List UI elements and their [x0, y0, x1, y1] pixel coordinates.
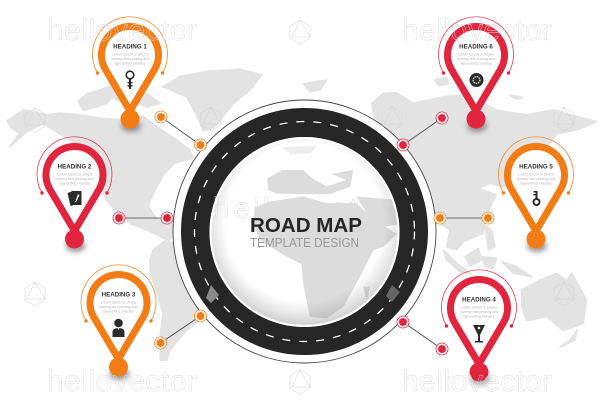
road [194, 122, 414, 342]
title: road map: ROAD MAP [250, 215, 362, 237]
subtitle: template design: TEMPLATE DESIGN [250, 235, 359, 250]
node: orange top-left ring [194, 139, 206, 151]
pin: heading 5: dummy text printing and [517, 177, 555, 181]
node: red top-right ring [397, 139, 409, 151]
pin: heading 1 [92, 17, 168, 132]
watermark: hellovector text: hellovector [47, 365, 197, 398]
node: orange bottom-left ring [194, 310, 206, 322]
node: orange bottom-left outer [154, 337, 166, 349]
pin: heading 5: Lorem Ipsum is simply [518, 172, 554, 176]
pin: heading 3: typesetting industry [103, 310, 134, 314]
pin: heading 1: HEADING 1 [113, 44, 147, 50]
pin: heading 4: typesetting industry [464, 314, 495, 318]
white rim [210, 138, 398, 326]
pin: heading 1: dummy text printing and [111, 57, 149, 61]
pin: heading 3: Lorem Ipsum is simply [101, 300, 137, 304]
road centre dashes [194, 122, 414, 342]
pin: heading 4: HEADING 4 [462, 296, 496, 304]
pin: heading 6 [438, 17, 514, 132]
pin: heading 5: typesetting industry [521, 182, 552, 186]
icon: goblet [473, 325, 485, 342]
pin: heading 2: Lorem Ipsum is simply [57, 172, 93, 176]
node: orange right ring [434, 212, 446, 224]
node: red bottom-right ring [397, 316, 409, 328]
pin: heading 6: dummy text printing and [457, 57, 495, 61]
icon: gear badge [470, 73, 484, 87]
pin: heading 6: HEADING 6 [459, 44, 493, 50]
pin: heading 6: typesetting industry [461, 62, 492, 66]
watermark: hellovector text: hellovector [402, 14, 552, 47]
node: red left outer [113, 212, 125, 224]
watermark: hellovector text: hellovector [402, 365, 552, 398]
pin: heading 6: Lorem Ipsum is simply [458, 52, 494, 56]
central disc with map [210, 137, 403, 327]
icon: notebook and pen [68, 191, 82, 206]
icon: key [534, 191, 540, 205]
inner map: Europe, Arabia and Africa [253, 146, 403, 318]
node: red bottom-right outer [436, 343, 448, 355]
pin: heading 3 [81, 265, 156, 380]
world map: western hemisphere [7, 69, 262, 360]
watermark: hellovector text [47, 14, 552, 398]
connector lines [119, 117, 488, 349]
pin: heading 3: HEADING 3 [102, 292, 136, 298]
pin: heading 4 [442, 270, 516, 385]
pin: heading 4: Lorem Ipsum is simply [461, 306, 497, 310]
pin: heading 1: typesetting industry [115, 62, 146, 66]
pin: heading 3: dummy text printing and [99, 305, 138, 309]
pin: heading 2: dummy text printing and [55, 177, 94, 181]
watermark: hellovector text: hellovector [213, 192, 391, 225]
icon: key ring [126, 71, 134, 89]
world map: eastern hemisphere [303, 77, 597, 347]
watermark: hellovector text: hellovector [47, 14, 197, 47]
pin: heading 4: dummy text printing and [460, 310, 498, 314]
road ring: thin outer line and white band [173, 100, 436, 363]
node: orange top-left outer [155, 111, 167, 123]
pin: heading 2 [37, 137, 112, 252]
icon: person [112, 319, 124, 337]
pin: heading 1: Lorem Ipsum is simply [112, 52, 148, 56]
node: red top-right outer [436, 112, 448, 124]
pin: heading 5 [498, 137, 574, 252]
inner disc shadow [212, 139, 398, 325]
pin: heading 2: typesetting industry [59, 182, 90, 186]
pin: heading 5: HEADING 5 [519, 164, 553, 170]
pin: heading 2: HEADING 2 [58, 164, 92, 170]
node: orange right outer [482, 212, 494, 224]
node: red left ring [161, 212, 173, 224]
